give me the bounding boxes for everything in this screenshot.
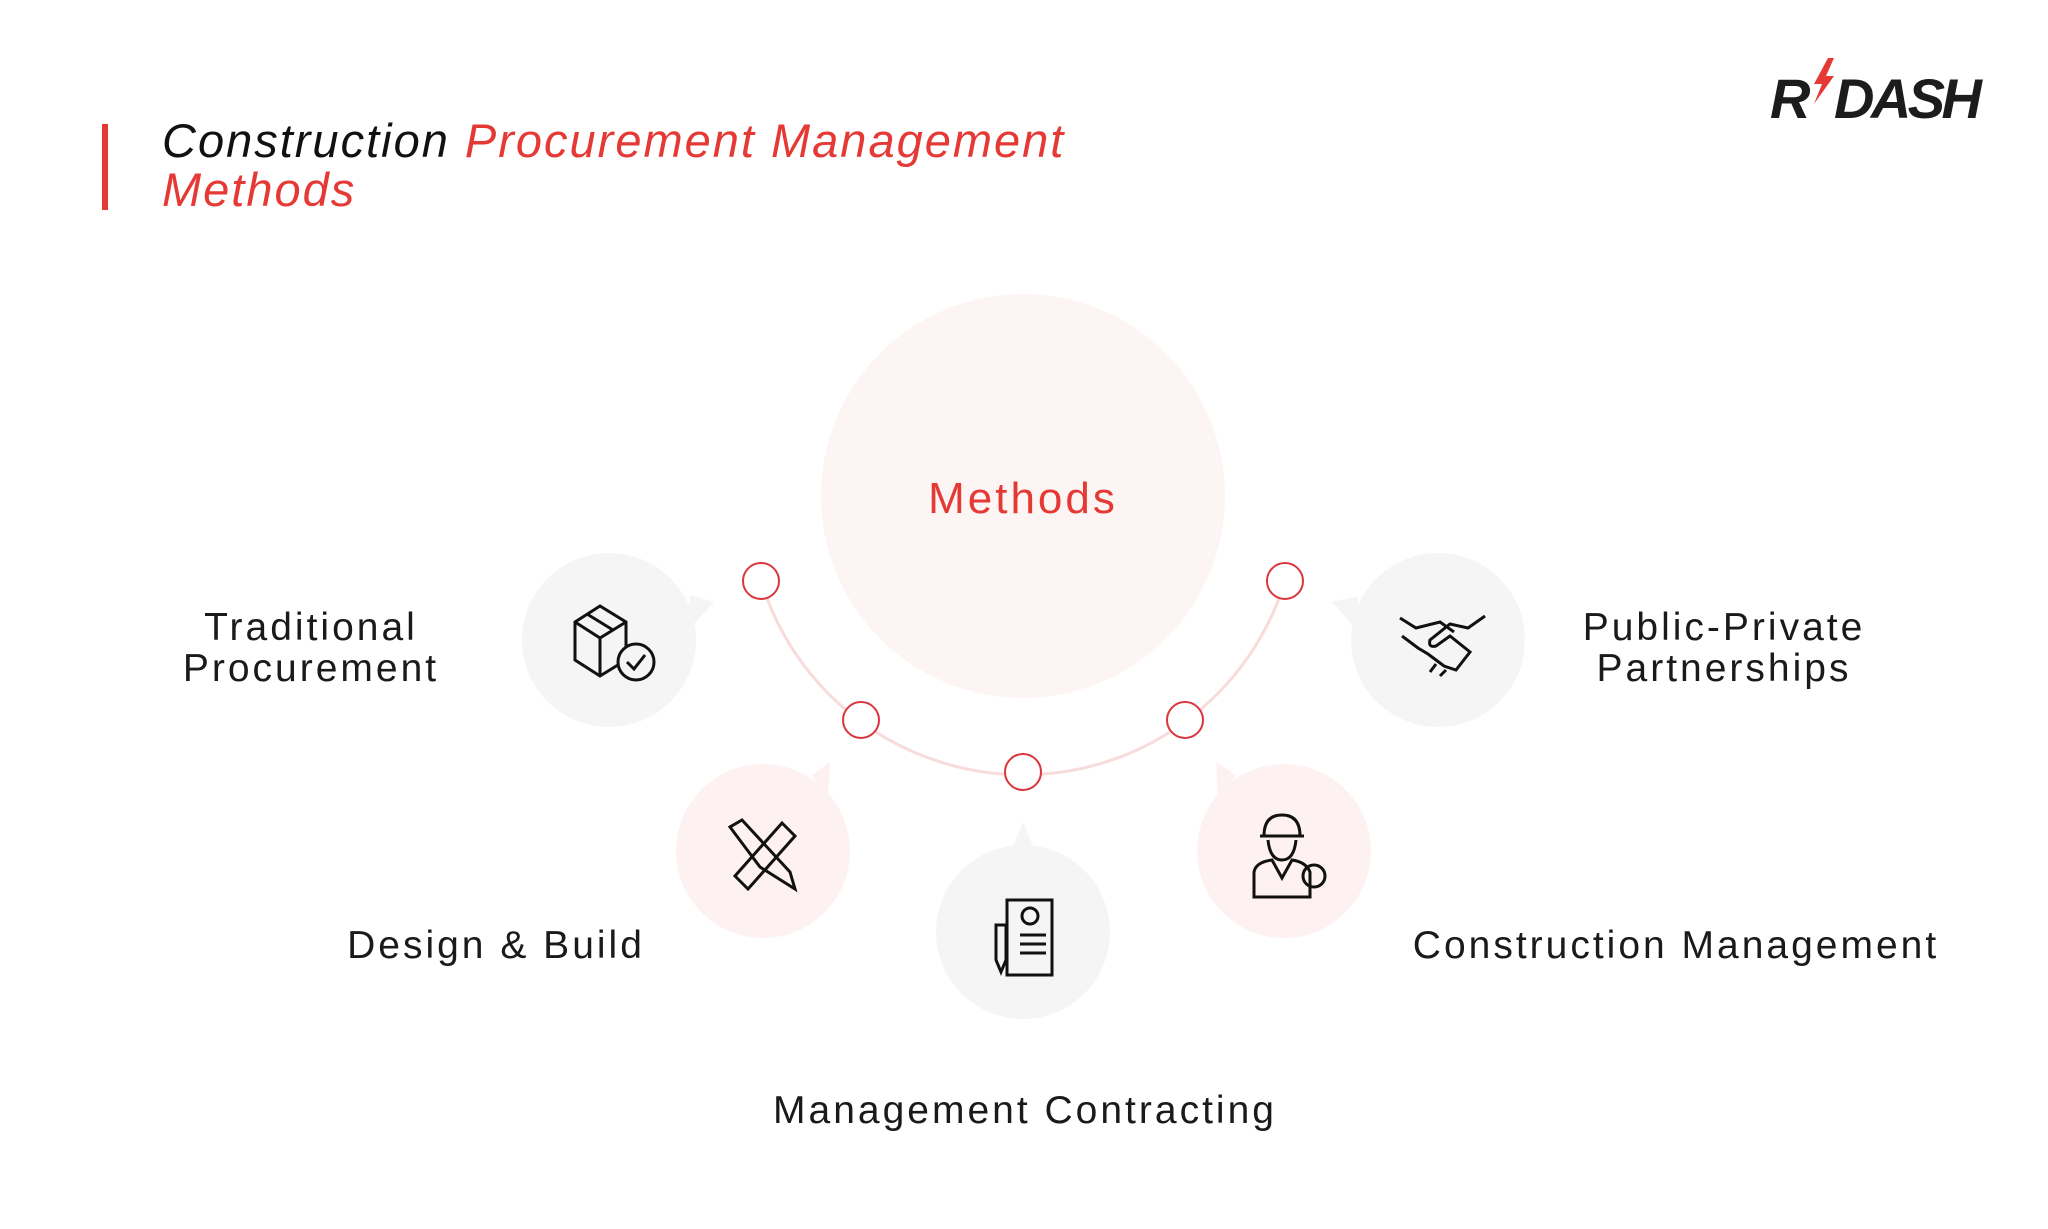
- central circle: [821, 294, 1225, 698]
- icon bubble: public-private partnerships: [1332, 553, 1525, 727]
- label: public-private partnerships: Public-Private: [1583, 606, 1865, 649]
- title: Methods: [162, 163, 356, 216]
- label: traditional procurement: Procurement: [183, 647, 439, 690]
- icon bubble: construction management: [1197, 762, 1371, 938]
- label: public-private partnerships: [1583, 606, 1865, 690]
- label: public-private partnerships: Partnerships: [1597, 647, 1851, 690]
- label: traditional procurement: Traditional: [204, 606, 418, 649]
- title: [162, 114, 1065, 216]
- icon bubble: design & build: [676, 762, 850, 938]
- label: design & build: Design & Build: [347, 924, 645, 967]
- icon bubble: traditional procurement: [522, 553, 714, 727]
- label: traditional procurement: [183, 606, 439, 690]
- label: management contracting: Management Contracting: [773, 1089, 1277, 1132]
- label: construction management: Construction Management: [1413, 924, 1939, 967]
- title: Construction Procurement Management: [162, 114, 1065, 167]
- central circle: Methods: [928, 474, 1118, 523]
- arc connector: [743, 563, 1303, 790]
- icon bubble: management contracting: [936, 822, 1110, 1019]
- logo: [1770, 58, 1984, 124]
- title accent bar: [102, 124, 108, 210]
